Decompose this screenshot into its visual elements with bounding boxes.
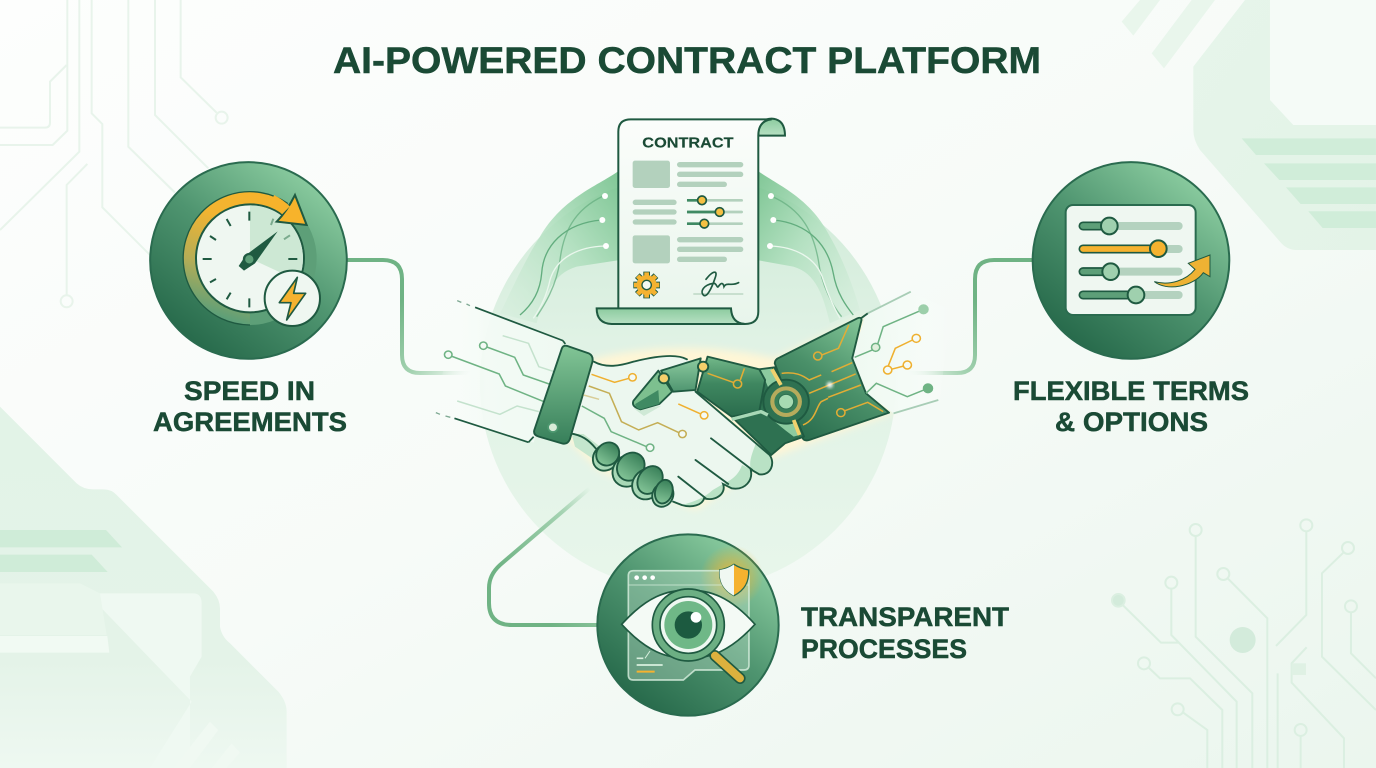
clock wedge — [250, 205, 303, 281]
background shape: top right — [1122, 0, 1376, 250]
human hand — [572, 356, 772, 506]
shirt cuff — [534, 346, 593, 444]
human sleeve — [435, 300, 565, 443]
bottom roll — [597, 308, 745, 324]
swoosh arrow — [1154, 255, 1210, 287]
finger tip — [633, 371, 672, 409]
data streams right — [757, 170, 860, 323]
clock ticks — [203, 212, 297, 307]
arrow joint — [272, 200, 286, 210]
slider row 4 — [1079, 287, 1183, 303]
signature — [693, 272, 743, 296]
label: transparent processes: PROCESSES — [801, 634, 967, 664]
clock face — [196, 204, 304, 312]
finger shading — [682, 443, 772, 506]
label: speed in agreements: SPEED IN — [184, 376, 315, 406]
label: speed in agreements: AGREEMENTS — [153, 407, 347, 437]
shield — [720, 564, 749, 596]
gold glow — [700, 545, 763, 608]
background shape: bottom left — [0, 407, 287, 768]
connector: flexible terms to handshake — [905, 260, 1032, 373]
yellow joints — [659, 373, 669, 383]
icon disc: speed clock — [150, 162, 347, 359]
contract document with wings — [500, 119, 860, 324]
magnifier handle fill — [715, 656, 740, 678]
scroll curl top — [758, 119, 785, 136]
slider row 1 — [1079, 218, 1183, 234]
label: transparent processes: TRANSPARENT — [801, 602, 1010, 632]
document sliders — [687, 196, 724, 228]
label: speed in agreements — [153, 376, 347, 437]
warm glow — [568, 317, 892, 510]
slider row 2 — [1079, 240, 1183, 257]
robot gold traces — [708, 325, 883, 425]
clock needle — [239, 231, 278, 271]
finger segment — [661, 358, 701, 392]
wrist stem — [572, 433, 603, 458]
eye — [622, 590, 755, 658]
browser window — [628, 571, 749, 680]
right sleeve circuit lines — [855, 305, 932, 397]
magnifier lens — [652, 589, 724, 661]
icon: gear — [633, 272, 660, 298]
handshake illustration — [435, 292, 950, 510]
gold circuit traces on hand — [582, 374, 708, 451]
background circuit: top left — [0, 0, 228, 307]
palm — [697, 357, 765, 417]
icon disc: transparency eye — [597, 534, 779, 716]
slider row 3 — [1079, 263, 1183, 280]
magnifier handle — [715, 656, 740, 678]
placeholder text rows — [633, 161, 743, 263]
document heading: CONTRACT — [642, 134, 734, 151]
label: flexible terms and options — [1013, 376, 1249, 437]
forearm plate — [775, 318, 889, 440]
background circuit: bottom right — [1112, 519, 1376, 768]
paper — [618, 119, 772, 324]
wrist hub — [763, 380, 809, 424]
lightning badge — [265, 271, 320, 326]
sleeve circuit lines — [444, 336, 554, 414]
hand outline — [570, 356, 772, 506]
gripping fingers — [588, 438, 677, 510]
label: flexible terms and options: FLEXIBLE TERMS — [1013, 376, 1249, 406]
robot spark — [827, 382, 833, 388]
robot hand — [633, 292, 950, 455]
connector: speed to handshake — [347, 260, 470, 373]
wrist base — [735, 367, 804, 455]
gold arc arrow — [190, 198, 284, 318]
panel — [1066, 205, 1196, 315]
connector: transparent processes to handshake — [489, 488, 598, 625]
data streams left — [500, 170, 620, 323]
right sleeve — [852, 292, 950, 413]
light wrist band — [761, 369, 800, 437]
title: AI-POWERED CONTRACT PLATFORM — [333, 40, 1041, 81]
ring — [183, 192, 317, 325]
icon disc: flexible sliders — [1033, 162, 1229, 359]
central halo circle — [480, 175, 896, 591]
label: flexible terms and options: & OPTIONS — [1055, 407, 1208, 437]
arrowhead — [277, 195, 307, 225]
label: transparent processes — [801, 602, 1010, 664]
